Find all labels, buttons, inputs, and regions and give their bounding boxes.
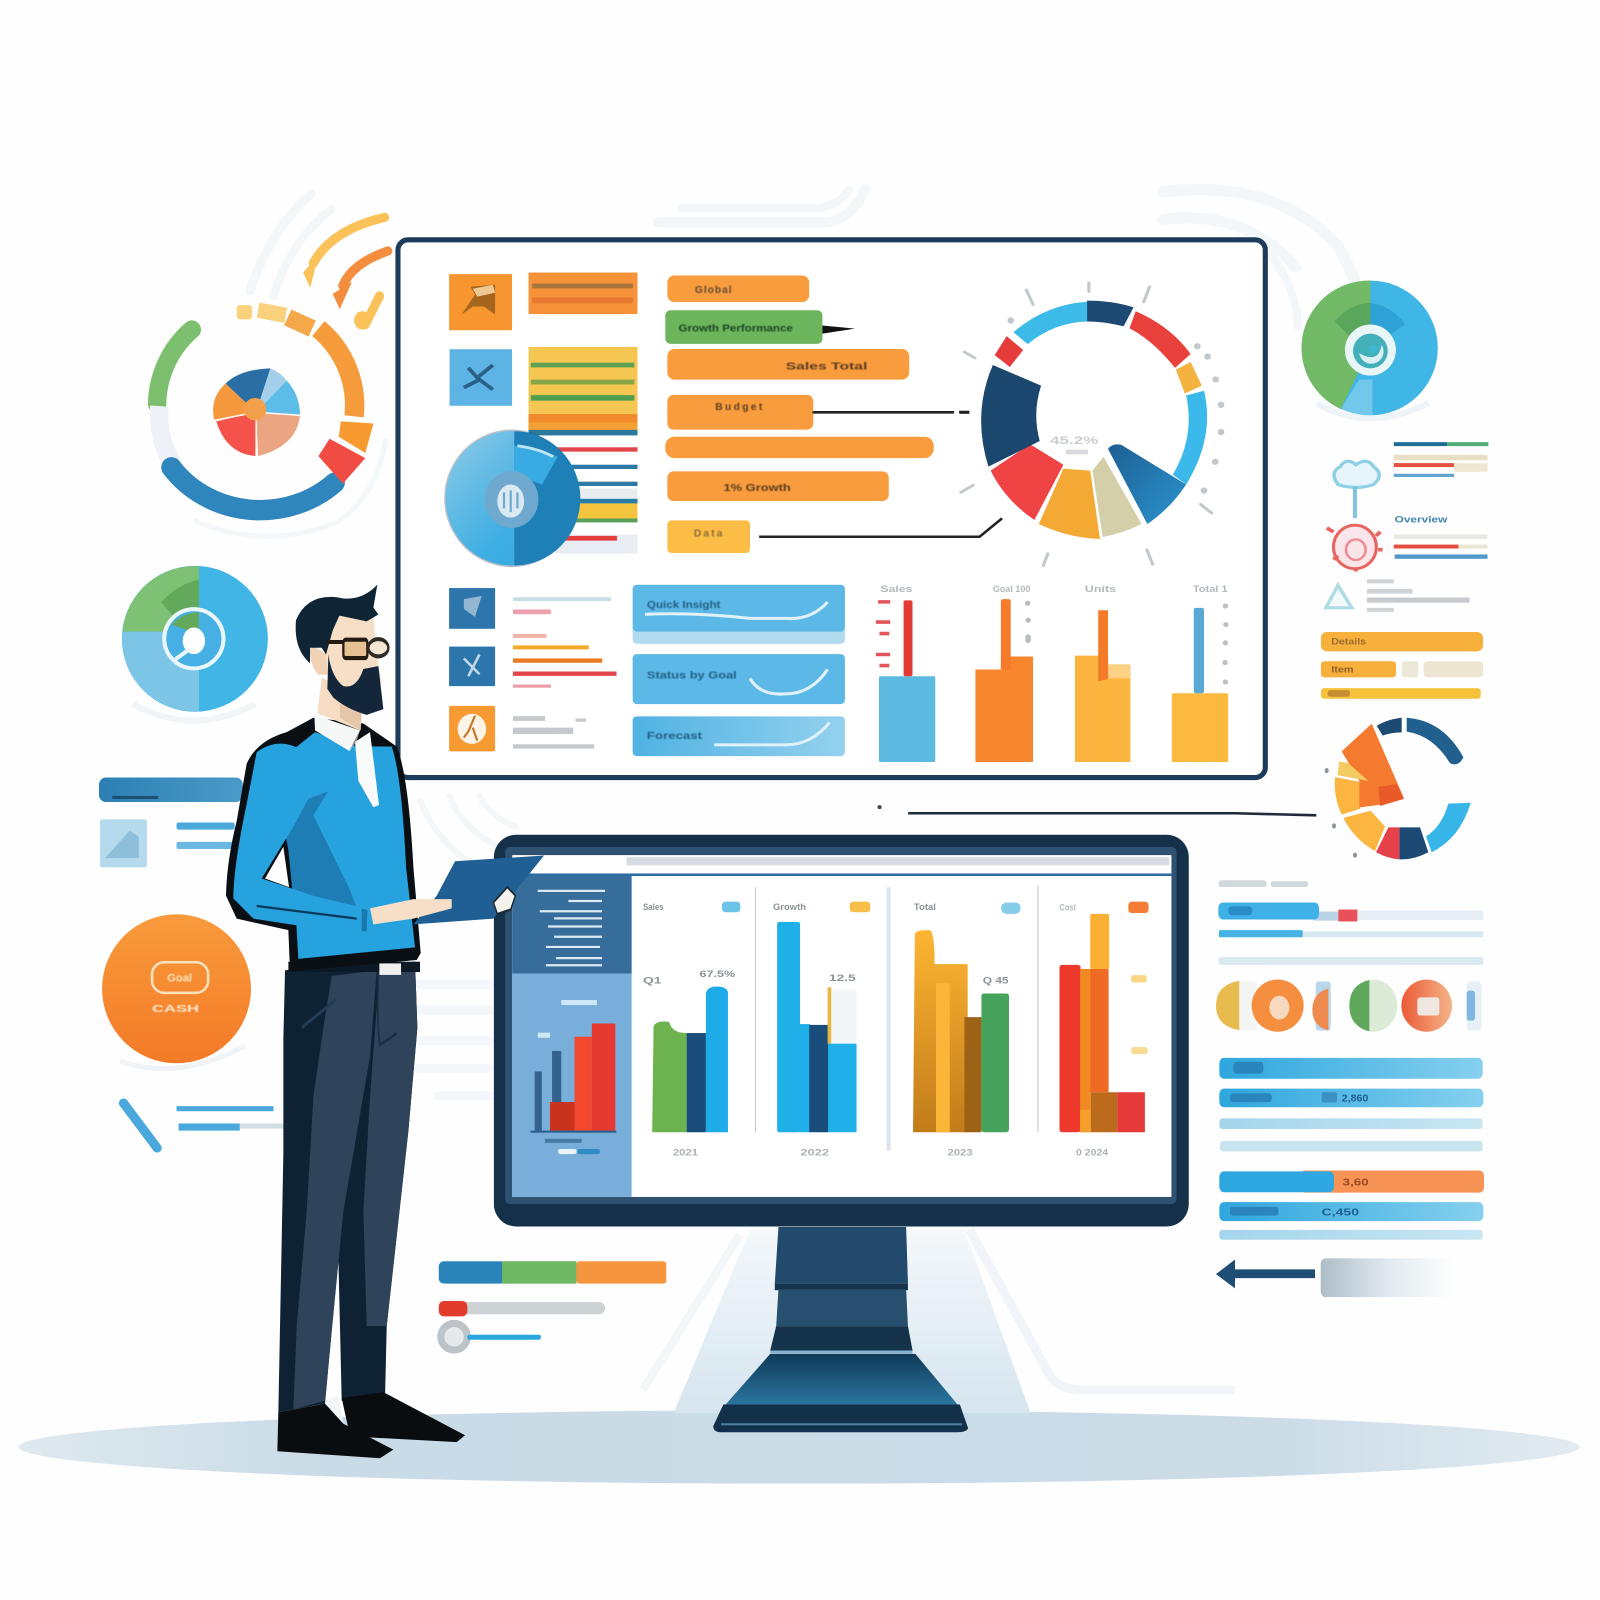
- orange circle badge: Goal: [167, 973, 192, 985]
- orange circle badge: CASH: [152, 1004, 199, 1015]
- chart 1: 2021: [673, 1148, 699, 1158]
- blue disc chart: [444, 430, 580, 567]
- split bars: C,450: [1322, 1207, 1359, 1219]
- split bars: 3,60: [1343, 1177, 1369, 1189]
- trousers: [278, 962, 420, 1412]
- background waves: [250, 189, 1359, 1096]
- glasses: [327, 639, 388, 658]
- status pills: Global: [695, 285, 732, 296]
- status pills: Data: [694, 529, 723, 540]
- panel: right data list: [1216, 880, 1484, 1297]
- icon: virus marker: [1327, 525, 1383, 571]
- status pills: Sales Total: [786, 361, 868, 372]
- chart 2: Growth: [773, 902, 806, 913]
- dark connector leader: [812, 410, 969, 416]
- line rows: [1394, 442, 1488, 477]
- bar group 3: Units: [1085, 585, 1117, 595]
- blue trend cards: [633, 585, 845, 756]
- chart 3: Q 45: [983, 976, 1009, 986]
- legend rows: [513, 597, 617, 749]
- amber pills: Details: [1331, 637, 1366, 647]
- chart 1: 67.5%: [699, 970, 736, 980]
- chart 2: 2022: [801, 1148, 829, 1158]
- light beams behind monitor stand: [643, 1230, 1235, 1413]
- striped yellow row: [529, 347, 638, 431]
- status pills: [665, 276, 934, 553]
- right donut chart: [1327, 718, 1471, 859]
- ground shadow: [18, 1410, 1580, 1484]
- icon: blue tools tile: [450, 349, 512, 406]
- donut chart: 45.2%: [1050, 434, 1099, 447]
- neck: [317, 678, 362, 730]
- progress rows: [1218, 902, 1483, 965]
- bar group 1: [876, 585, 935, 762]
- head: [296, 585, 383, 715]
- monitor bar charts: [643, 885, 1149, 1158]
- orange circle badge: [102, 914, 251, 1069]
- inner pie: [213, 368, 300, 456]
- blue trend cards: Status by Goal: [647, 671, 737, 682]
- icon: pale tile: [100, 819, 147, 867]
- chart 2: 12.5: [829, 974, 857, 984]
- bar group 3: [1075, 585, 1130, 762]
- chart 1: Q1: [643, 976, 662, 986]
- panel: donut and bars: [812, 283, 1228, 762]
- tablet: [413, 856, 544, 924]
- panel: right side list with icons: [1321, 442, 1488, 699]
- donut ticks: [961, 283, 1221, 566]
- bar group 2: [975, 585, 1033, 762]
- top-right pie circle: [1301, 281, 1438, 418]
- grey notes: [1367, 579, 1470, 612]
- status pills: Budget: [715, 402, 763, 413]
- shirt collar and tie: [314, 715, 379, 807]
- icon: blue tool tile: [449, 647, 495, 686]
- blue trend cards: Forecast: [647, 731, 703, 742]
- blue bars: 2,860: [1342, 1093, 1368, 1105]
- panel: left column icons and stacked rows: [444, 273, 638, 751]
- monitor sidebar: [512, 876, 632, 1197]
- left items: [99, 778, 243, 867]
- blue bars: [1219, 1058, 1483, 1152]
- connector lines: [759, 326, 1002, 537]
- chart 3: 2023: [947, 1148, 973, 1158]
- chart 4: [1059, 902, 1149, 1158]
- middle rows: Overview: [1395, 515, 1447, 525]
- amber pills: [1321, 632, 1483, 699]
- icon: blue map tile: [449, 588, 495, 629]
- chart 1: Sales: [643, 902, 664, 913]
- donut chart: [981, 301, 1207, 539]
- chart 4: 0 2024: [1076, 1148, 1109, 1158]
- split bars: [1219, 1171, 1484, 1240]
- icon: orange chart tile: [449, 274, 512, 330]
- decorative arrows top-left: [303, 217, 388, 330]
- bar group 4: [1172, 585, 1228, 762]
- bar group 2: Goal 100: [993, 585, 1031, 595]
- large dashboard panel: [398, 240, 1265, 778]
- slash icon and lines: [123, 1103, 286, 1148]
- chart 2: [773, 902, 870, 1158]
- amber pills: Item: [1331, 665, 1354, 675]
- left pie circle: [122, 566, 268, 720]
- stacked orange row: [529, 273, 638, 314]
- chart 3: Total: [914, 902, 936, 913]
- striped data rows: [529, 430, 638, 554]
- icon row: [1216, 980, 1481, 1032]
- icon: cloud network: [1334, 461, 1379, 518]
- status pills: Growth Performance: [679, 324, 793, 335]
- shoes: [277, 1392, 465, 1458]
- monitor: [494, 835, 1189, 1432]
- icon: triangle: [1326, 585, 1352, 608]
- bar group 1: Sales: [880, 585, 913, 595]
- chart 1: [643, 902, 740, 1158]
- person: analyst holding tablet: [226, 585, 544, 1458]
- blue trend cards: Quick Insight: [647, 600, 721, 611]
- sweater: [226, 718, 421, 971]
- status pills: 1% Growth: [723, 483, 791, 494]
- chart 3: [913, 902, 1020, 1158]
- arrow and grey tag: [1216, 1258, 1454, 1297]
- middle rows: [1394, 515, 1488, 559]
- connector under panel: [878, 805, 1316, 815]
- bar group 4: Total 1: [1193, 585, 1228, 595]
- list header: [1218, 880, 1308, 887]
- monitor stand: [713, 1227, 968, 1432]
- bottom-left legend bars: [439, 1261, 666, 1350]
- hands: [370, 887, 515, 924]
- chart 4: Cost: [1059, 903, 1077, 913]
- icon: orange clock tile: [449, 706, 495, 751]
- top-left gauge ring: [157, 305, 386, 536]
